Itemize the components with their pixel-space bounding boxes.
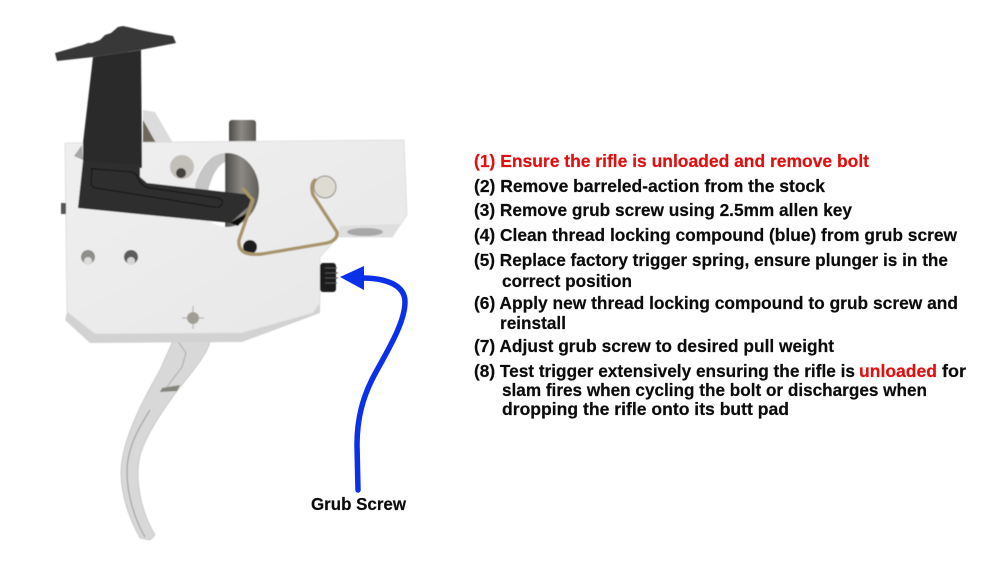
step 3: (3) Remove grub screw using 2.5mm allen key <box>474 200 852 220</box>
trigger blade <box>121 336 211 540</box>
step 8: (8) Test trigger extensively ensuring the rifle is <box>474 361 855 381</box>
step 8: slam fires when cycling the bolt or discharges when <box>502 380 927 400</box>
mounting holes <box>81 250 138 265</box>
lower set screw <box>182 306 204 329</box>
upper rear screw <box>74 145 83 160</box>
step 8: for <box>942 361 966 381</box>
lower block shadow <box>65 303 320 343</box>
step 1: (1) Ensure the rifle is unloaded and remove bolt <box>474 151 869 171</box>
instruction list <box>474 151 966 419</box>
trigger assembly illustration <box>55 26 407 540</box>
step 6: reinstall <box>500 313 566 333</box>
grub screw <box>320 263 338 292</box>
silver trigger body <box>65 140 407 334</box>
top pin <box>229 120 256 144</box>
step 8 <box>474 361 966 419</box>
rear side screw <box>61 203 66 214</box>
trigger spring <box>239 180 337 254</box>
sear lever and safety <box>55 26 252 226</box>
rear silver tab <box>143 110 173 143</box>
front block underside <box>338 224 400 237</box>
step 2: (2) Remove barreled-action from the stock <box>474 176 825 196</box>
step 5 <box>474 250 948 291</box>
blue arrow pointing to grub screw <box>340 266 405 490</box>
small upper hole <box>170 155 194 179</box>
large opening with pin <box>194 152 260 228</box>
step 8: dropping the rifle onto its butt pad <box>502 399 789 419</box>
step 8: unloaded <box>859 361 937 381</box>
step 6: (6) Apply new thread locking compound to grub screw and <box>474 293 958 313</box>
grub screw label: Grub Screw <box>311 494 406 514</box>
step 7: (7) Adjust grub screw to desired pull weight <box>474 336 834 356</box>
step 5: (5) Replace factory trigger spring, ensure plunger is in the <box>474 250 948 270</box>
plunger pin <box>314 176 336 198</box>
step 6 <box>474 293 958 333</box>
dark spring recess <box>243 240 257 254</box>
step 4: (4) Clean thread locking compound (blue) from grub screw <box>474 225 957 245</box>
step 5: correct position <box>502 271 632 291</box>
